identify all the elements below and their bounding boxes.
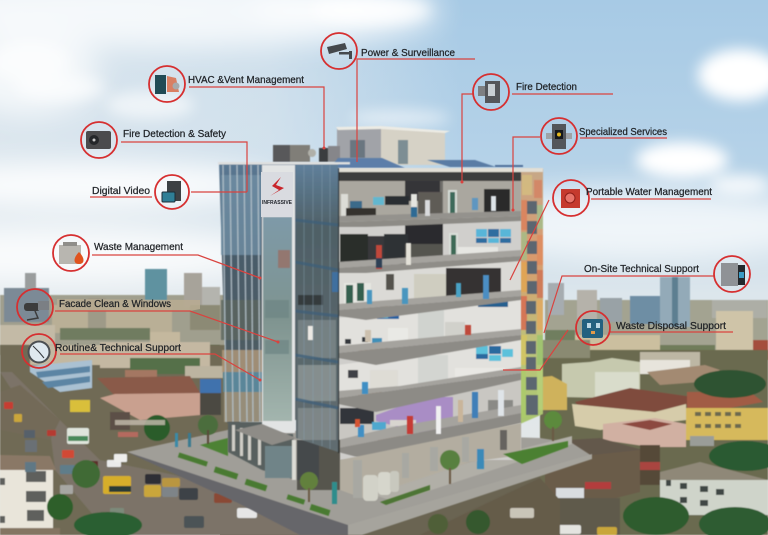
callout: Specialized Services bbox=[512, 118, 667, 212]
callout: Digital Video: Digital Video bbox=[92, 185, 150, 197]
callout: HVAC & Vent Management bbox=[149, 66, 326, 150]
icon: incinerator bbox=[59, 242, 84, 264]
floor surfaces and slabs bbox=[338, 211, 521, 222]
icon: cleaning rig bbox=[24, 301, 49, 320]
callout: Fire Detection bbox=[460, 74, 613, 184]
floor 6 room bbox=[338, 380, 521, 448]
floor 3 room bbox=[338, 261, 521, 310]
floor 2 room bbox=[338, 222, 521, 266]
ground level services bbox=[175, 411, 568, 516]
icon: red valve box bbox=[561, 189, 580, 208]
podium platform bbox=[127, 429, 592, 535]
city: distant skyline left bbox=[0, 269, 225, 370]
brand sign: INFRASSIVE bbox=[262, 200, 293, 206]
callout: Facade Clean & Windows bbox=[17, 289, 280, 344]
callout: Waste Management: Waste Management bbox=[94, 241, 183, 253]
callout: On-Site Technical Support bbox=[544, 256, 750, 333]
callout: Power & Surveillance: Power & Surveillance bbox=[361, 47, 455, 59]
office people bbox=[355, 194, 504, 437]
city: distant skyline right bbox=[545, 277, 768, 360]
callout: Specialized Services: Specialized Services bbox=[579, 126, 667, 138]
icon: hvac unit bbox=[155, 75, 180, 94]
callout: Waste Disposal Support: Waste Disposal Support bbox=[616, 320, 726, 332]
rooftop hvac units bbox=[273, 145, 340, 162]
city: left street scene bbox=[0, 342, 330, 535]
city: ground under the building bbox=[220, 440, 560, 535]
reflection patches on left stripes bbox=[221, 175, 262, 422]
icon: detector box bbox=[86, 131, 111, 149]
rooftop penthouse bbox=[336, 126, 450, 165]
entrance and canopy bbox=[228, 422, 296, 480]
callout: Waste Disposal Support bbox=[503, 311, 733, 370]
glass facade bbox=[218, 162, 350, 453]
cutaway floors bbox=[338, 168, 543, 460]
floor 5 room bbox=[338, 340, 521, 398]
icon: detection panel bbox=[478, 81, 500, 103]
interior glimpses in glass bbox=[298, 272, 338, 440]
icon: wall clock bbox=[28, 342, 50, 362]
building bbox=[175, 126, 568, 516]
floor 4 room bbox=[338, 300, 521, 353]
callout: On-Site Technical Support: On-Site Technical Support bbox=[584, 263, 699, 275]
solar panels bbox=[330, 158, 523, 168]
icon: server cabinet bbox=[721, 263, 745, 286]
callout: Portable Water Management: Portable Water Management bbox=[586, 186, 712, 198]
callout: HVAC & Vent Management: HVAC &Vent Management bbox=[188, 74, 304, 86]
city: right neighbourhood bbox=[420, 340, 768, 535]
callout: Fire Detection & Safety: Fire Detection & Safety bbox=[123, 128, 227, 140]
icon: video recorder and screen bbox=[162, 181, 181, 202]
callout: Routine & Technical Support bbox=[22, 334, 262, 382]
icon: control unit bbox=[546, 124, 572, 149]
callout: Facade Clean & Windows: Facade Clean & Windows bbox=[59, 298, 171, 310]
colourful mural wall bbox=[520, 169, 543, 424]
callout: Fire Detection & Safety bbox=[81, 122, 247, 192]
icon: disposal panel bbox=[582, 319, 603, 338]
callout: Power & Surveillance bbox=[321, 33, 475, 162]
icon: security camera bbox=[327, 43, 352, 59]
callout: Routine & Technical Support: Routine& Technical Support bbox=[55, 342, 181, 354]
floor 1 room bbox=[338, 181, 521, 220]
callout: Portable Water Management bbox=[510, 180, 712, 280]
callout: Waste Management bbox=[53, 235, 262, 280]
brand sign bbox=[261, 172, 293, 217]
callout: Fire Detection: Fire Detection bbox=[516, 81, 577, 93]
callout: Digital Video bbox=[90, 175, 247, 209]
